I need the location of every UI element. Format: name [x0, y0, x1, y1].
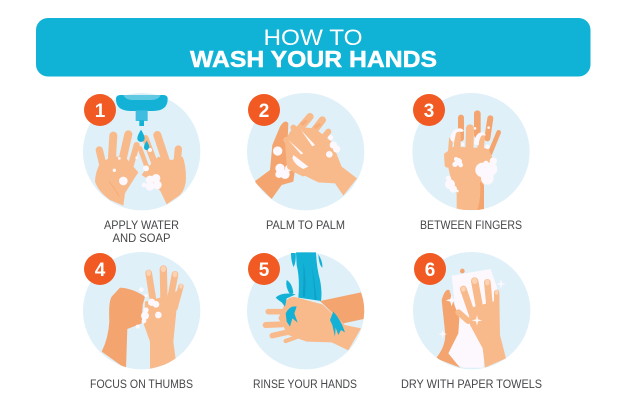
- label: apply water and soap: APPLY WATER: [104, 220, 179, 232]
- foam under hand: [273, 137, 292, 179]
- front hand: [458, 278, 506, 368]
- title: how to: HOW TO: [264, 25, 362, 50]
- sparkles: [438, 279, 506, 338]
- icon: soap dispenser: [116, 95, 168, 126]
- header banner: [36, 18, 590, 76]
- badge 5: 5: [259, 260, 270, 281]
- left hand: [95, 134, 138, 206]
- back hand: [436, 269, 465, 368]
- front hand: [266, 297, 361, 350]
- fist: [102, 288, 145, 369]
- panel: step 6 dry with paper towels: [413, 252, 530, 369]
- label: palm to palm: PALM TO PALM: [266, 220, 345, 232]
- right hand: [140, 135, 186, 204]
- foam right: [326, 135, 340, 158]
- panel: step 3 between fingers: [412, 93, 530, 210]
- label: apply water and soap: AND SOAP: [112, 233, 171, 245]
- interlaced hands: [445, 114, 499, 210]
- water stream: [291, 252, 322, 301]
- badge 4: 4: [95, 260, 106, 281]
- badge 1: 1: [95, 101, 106, 122]
- soap foam: [113, 148, 162, 191]
- panel: step 5 rinse your hands: [247, 252, 364, 369]
- label: dry with paper towels: DRY WITH PAPER TOWELS: [401, 379, 542, 391]
- back hand: [254, 121, 297, 199]
- panel: step 1 apply water and soap: [83, 93, 200, 210]
- water splashes: [276, 280, 345, 337]
- panel: step 2 palm to palm: [247, 93, 364, 210]
- badge 2: 2: [259, 101, 269, 122]
- open hand: [144, 266, 183, 369]
- panel: step 4 focus on thumbs: [83, 252, 200, 369]
- soap foam: [136, 287, 162, 329]
- icon: water drops: [137, 130, 149, 150]
- label: focus on thumbs: FOCUS ON THUMBS: [90, 379, 193, 391]
- label: rinse your hands: RINSE YOUR HANDS: [253, 379, 357, 391]
- badge 6: 6: [425, 260, 435, 281]
- back arm: [320, 292, 364, 323]
- soap foam: [445, 126, 497, 193]
- front hand: [285, 117, 357, 196]
- badge 3: 3: [424, 101, 434, 122]
- title: wash your hands: WASH YOUR HANDS: [190, 46, 437, 72]
- towel: [448, 269, 497, 368]
- label: between fingers: BETWEEN FINGERS: [420, 220, 522, 232]
- label: apply water and soap: [104, 220, 179, 245]
